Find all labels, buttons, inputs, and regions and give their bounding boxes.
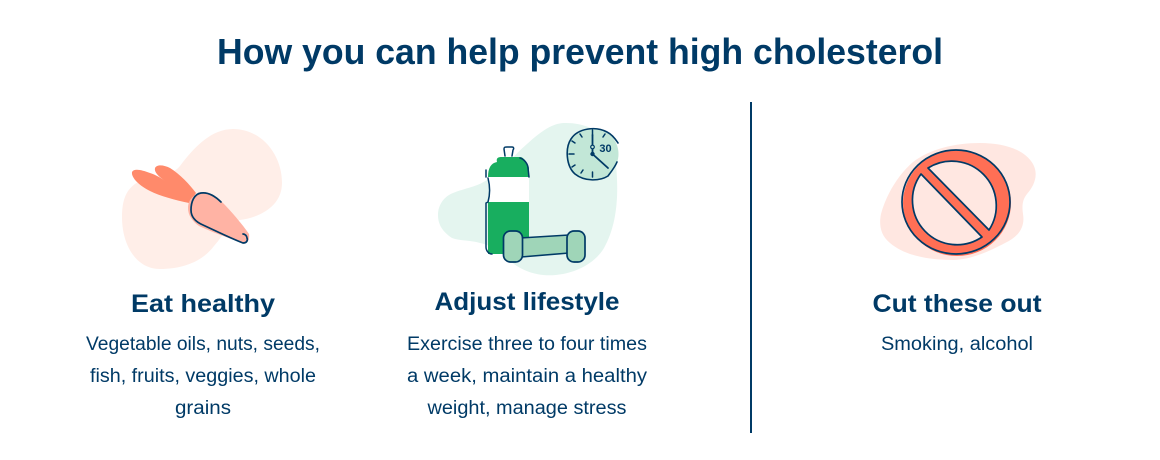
text: eat healthy details — [86, 334, 320, 419]
icon: carrot — [122, 129, 282, 269]
panel: cut these out — [872, 143, 1042, 355]
icon: prohibition sign — [880, 143, 1036, 260]
icon: exercise — [438, 123, 618, 275]
text: eat healthy details: Vegetable oils, nuts, seeds, — [86, 334, 320, 355]
text: eat healthy details: grains — [175, 398, 231, 419]
text: adjust lifestyle details — [407, 334, 648, 419]
title: How you can help prevent high cholesterol — [217, 31, 943, 72]
clock: 30 — [599, 143, 612, 155]
text: eat healthy details: fish, fruits, veggies, whole — [90, 366, 316, 387]
dumbbell — [504, 231, 585, 262]
heading: eat healthy: Eat healthy — [131, 290, 275, 318]
clock — [566, 128, 618, 180]
heading: adjust lifestyle: Adjust lifestyle — [434, 288, 620, 316]
text: adjust lifestyle details: a week, maintain a healthy — [407, 366, 648, 387]
bottle — [486, 147, 529, 254]
text: adjust lifestyle details: weight, manage stress — [426, 398, 626, 419]
text: cut these out details: Smoking, alcohol — [881, 334, 1033, 355]
panel: adjust lifestyle — [407, 123, 648, 419]
heading: cut these out: Cut these out — [872, 290, 1042, 318]
panel: eat healthy — [86, 129, 320, 419]
text: adjust lifestyle details: Exercise three to four times — [407, 334, 647, 355]
